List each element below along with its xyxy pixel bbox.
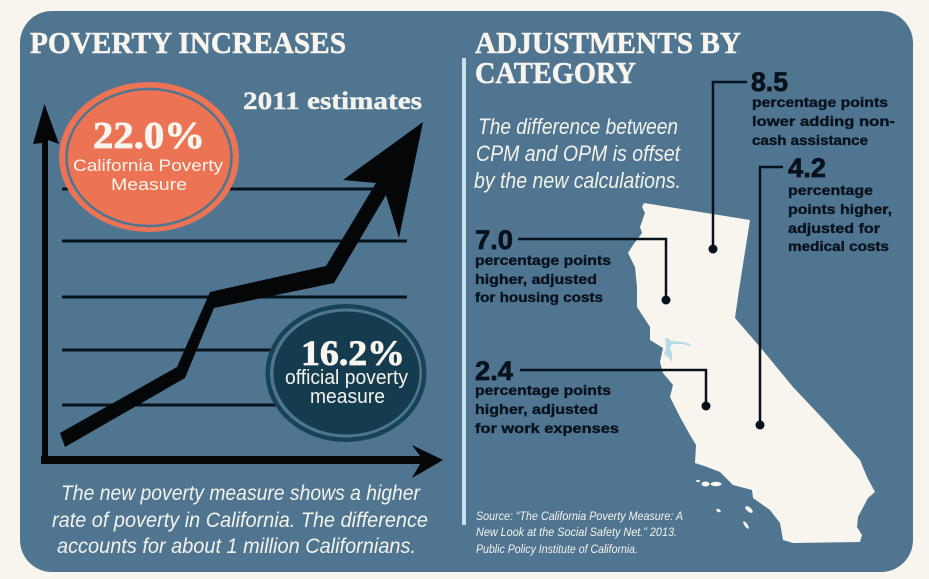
caption: new poverty measure (52, 482, 428, 558)
callout: 4.2 medical costs: medical costs (788, 238, 889, 254)
line chart (33, 104, 443, 478)
caption: new poverty measure: rate of poverty in California. The difference (52, 509, 428, 532)
source note: Source: “The California Poverty Measure: A (476, 509, 683, 523)
caption: new poverty measure: The new poverty measure shows a higher (61, 482, 421, 505)
callout: 22.0% California Poverty Measure: California Poverty (73, 156, 224, 175)
source note (476, 509, 683, 556)
intro text: by the new calculations. (474, 168, 681, 193)
callout: 2.4 work expenses: higher, adjusted (475, 401, 598, 417)
label: 2011 estimates: 2011 estimates (243, 88, 422, 115)
intro text: The difference between (478, 114, 678, 139)
source note: Public Policy Institute of California. (476, 542, 638, 556)
callout: 4.2 medical costs (756, 153, 892, 430)
heading: adjustments by category: ADJUSTMENTS BY (475, 25, 741, 60)
callout: 4.2 medical costs: percentage (788, 182, 873, 198)
callout: 22.0% California Poverty Measure (59, 82, 239, 232)
x axis arrow (41, 445, 443, 478)
callout: 8.5 non-cash assistance: percentage points (752, 94, 888, 110)
callout: 22.0% California Poverty Measure: Measure (111, 175, 187, 194)
callout: 16.2% official poverty measure: 16.2% (301, 333, 405, 373)
callout: 8.5 non-cash assistance: lower adding non- (752, 113, 895, 129)
heading: poverty increases: POVERTY INCREASES (30, 25, 346, 60)
callout: 2.4 work expenses (475, 356, 710, 436)
callout: 8.5 non-cash assistance: cash assistance (752, 132, 868, 148)
callout: 4.2 medical costs: points higher, (788, 201, 892, 217)
callout: 4.2 medical costs: 4.2 (788, 153, 826, 183)
callout: 4.2 medical costs: adjusted for (788, 220, 881, 236)
trend arrow (60, 122, 423, 447)
callout: 8.5 non-cash assistance (708, 67, 895, 254)
callout: 2.4 work expenses: 2.4 (475, 356, 513, 386)
intro text: CPM and OPM is offset (476, 141, 681, 166)
callout: 7.0 housing costs: for housing costs (475, 289, 603, 305)
source note: New Look at the Social Safety Net.” 2013. (476, 525, 677, 539)
callout: 7.0 housing costs: 7.0 (475, 225, 513, 255)
caption: new poverty measure: accounts for about 1 million Californians. (57, 535, 416, 558)
callout: 7.0 housing costs (475, 225, 670, 305)
callout: 22.0% California Poverty Measure: 22.0% (93, 115, 205, 157)
callout: 7.0 housing costs: higher, adjusted (475, 271, 597, 287)
map of California (628, 203, 875, 543)
callout: 7.0 housing costs: percentage points (475, 252, 611, 268)
callout: 2.4 work expenses: percentage points (475, 382, 611, 398)
grid lines (62, 189, 407, 405)
bay (664, 338, 691, 362)
y axis arrow (33, 104, 59, 464)
islands (696, 480, 754, 530)
intro text (474, 114, 681, 193)
callout: 8.5 non-cash assistance: 8.5 (751, 67, 788, 97)
callout: 2.4 work expenses: for work expenses (475, 420, 619, 436)
heading: adjustments by category: CATEGORY (475, 55, 636, 90)
callout: 16.2% official poverty measure: official poverty (285, 367, 408, 389)
callout: 16.2% official poverty measure (266, 304, 426, 442)
callout: 16.2% official poverty measure: measure (310, 386, 385, 408)
vertical divider (462, 58, 466, 525)
heading: adjustments by category (475, 25, 741, 90)
